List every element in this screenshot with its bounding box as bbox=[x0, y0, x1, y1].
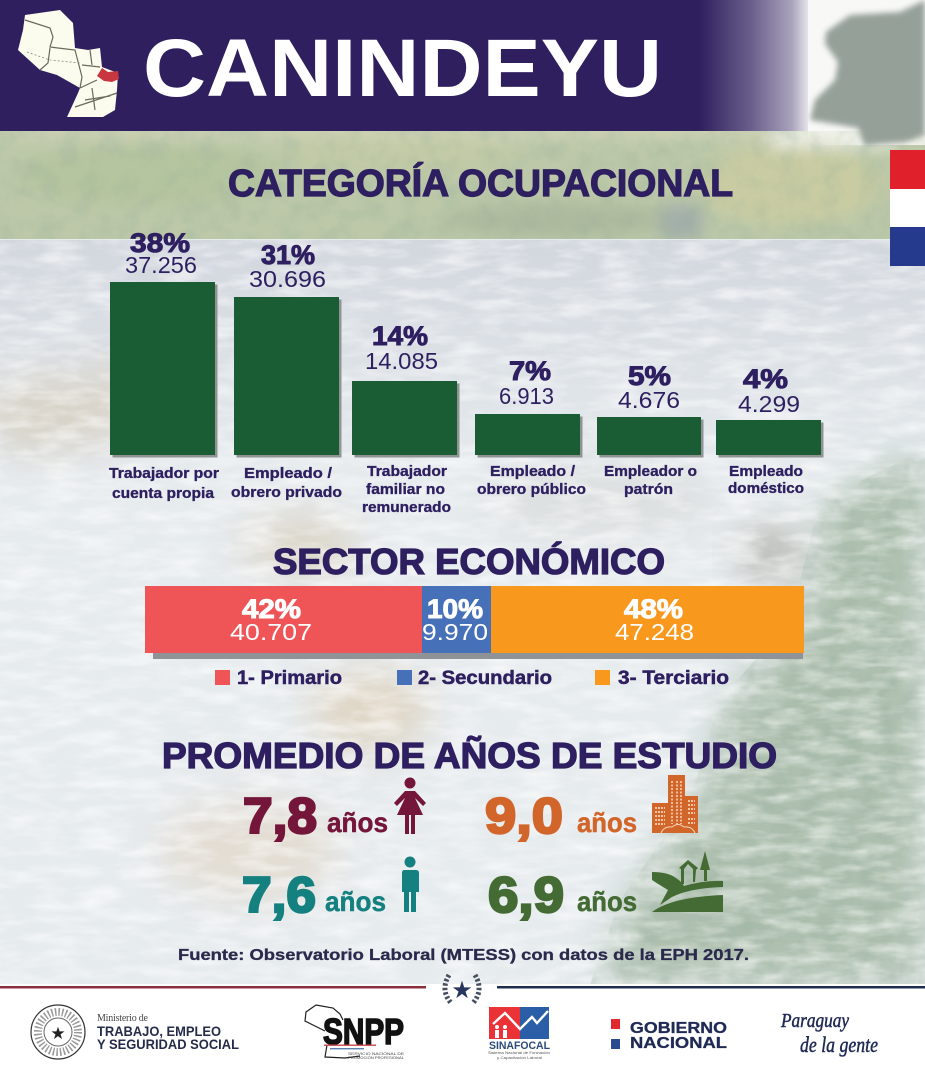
stat: hombres bbox=[242, 856, 419, 923]
bar: empleado / obrero privado bbox=[231, 240, 342, 501]
segment: terciario: 48% bbox=[624, 594, 683, 624]
bar: empleado / obrero privado: obrero privado bbox=[231, 485, 342, 501]
stat: mujeres: 7,8 bbox=[243, 788, 317, 844]
bar: empleado doméstico: 4.299 bbox=[738, 391, 800, 417]
icon: woman bbox=[394, 778, 426, 834]
bar: empleado doméstico: doméstico bbox=[728, 481, 804, 497]
bar: empleado doméstico: 4% bbox=[743, 364, 788, 394]
logo: SNPP: PROMOCIÓN PROFESIONAL bbox=[348, 1055, 405, 1060]
logo: SINAFOCAL: SINAFOCAL bbox=[489, 1040, 550, 1052]
stat: rural bbox=[488, 851, 723, 923]
logo: gobierno nacional: GOBIERNO bbox=[630, 1020, 727, 1037]
stat: rural: años bbox=[577, 886, 637, 917]
bar: empleador o patrón: Empleador o bbox=[604, 464, 697, 480]
bar chart: categoría ocupacional bbox=[109, 228, 824, 516]
bar: trabajador por cuenta propia: 37.256 bbox=[125, 252, 197, 278]
bar: empleador o patrón: patrón bbox=[624, 482, 673, 498]
bar: trabajador familiar no remunerado: 14% bbox=[372, 321, 428, 351]
logo: ministerio de trabajo: Ministerio de bbox=[97, 1013, 149, 1024]
source note: Fuente: Observatorio Laboral (MTESS) con datos de la EPH 2017. bbox=[178, 947, 749, 964]
segment: terciario: 47.248 bbox=[615, 619, 694, 645]
bar: empleado doméstico bbox=[716, 364, 824, 497]
icon: man bbox=[402, 856, 419, 912]
logo: SINAFOCAL: Sistema Nacional de Formación bbox=[488, 1050, 550, 1055]
bar: trabajador por cuenta propia: 38% bbox=[130, 228, 190, 258]
icon: city buildings bbox=[652, 775, 698, 833]
logo: ministerio de trabajo bbox=[31, 1005, 239, 1059]
heading: promedio de años de estudio: PROMEDIO DE AÑOS DE ESTUDIO bbox=[162, 734, 777, 776]
logo: paraguay de la gente bbox=[780, 1010, 878, 1057]
logo: ministerio de trabajo: Y SEGURIDAD SOCIAL bbox=[97, 1036, 239, 1052]
bar: empleado doméstico: Empleado bbox=[729, 464, 803, 480]
emblem: wreath and star: ★ bbox=[451, 977, 473, 1004]
stat: urbano bbox=[485, 775, 698, 844]
segment: terciario bbox=[491, 586, 804, 653]
bar: trabajador familiar no remunerado bbox=[352, 321, 460, 516]
stat: rural: 6,9 bbox=[488, 867, 564, 923]
icon: Paraguay map bbox=[18, 10, 119, 117]
bar: trabajador familiar no remunerado: 14.085 bbox=[365, 348, 438, 374]
heading: sector económico: SECTOR ECONÓMICO bbox=[273, 540, 665, 582]
logo: gobierno nacional bbox=[611, 1019, 727, 1052]
bar: empleado / obrero público: 6.913 bbox=[499, 383, 554, 409]
segment: secundario: 10% bbox=[427, 594, 483, 624]
footer panel bbox=[0, 975, 925, 1080]
legend bbox=[215, 668, 729, 689]
logo: SNPP bbox=[305, 1005, 405, 1060]
logo: ministerio de trabajo: TRABAJO, EMPLEO bbox=[97, 1023, 221, 1039]
logo: SNPP: SERVICIO NACIONAL DE bbox=[348, 1051, 404, 1056]
logo: ministerio de trabajo: ★ bbox=[50, 1024, 66, 1043]
logo: paraguay de la gente: Paraguay bbox=[780, 1010, 849, 1032]
flag bbox=[890, 150, 925, 266]
title: CANINDEYU bbox=[143, 23, 662, 114]
bar: empleador o patrón: 5% bbox=[628, 361, 671, 391]
bar: trabajador por cuenta propia bbox=[109, 228, 219, 502]
bar: trabajador familiar no remunerado: Trabajador bbox=[367, 464, 447, 480]
heading: categoría ocupacional: CATEGORÍA OCUPACIONAL bbox=[228, 161, 733, 205]
segment: secundario bbox=[422, 586, 491, 653]
bar: empleador o patrón: 4.676 bbox=[618, 387, 680, 413]
bar: empleado / obrero público: 7% bbox=[509, 356, 551, 386]
icon: rural house and hills bbox=[652, 851, 723, 912]
logo: SINAFOCAL bbox=[488, 1007, 550, 1060]
bar: trabajador por cuenta propia: Trabajador por bbox=[109, 466, 219, 482]
bar: empleado / obrero privado: Empleado / bbox=[244, 466, 332, 482]
legend: 2- Secundario bbox=[418, 668, 552, 689]
segment: secundario: 9.970 bbox=[422, 619, 488, 645]
segment: primario: 42% bbox=[242, 594, 301, 624]
stat: mujeres bbox=[243, 778, 426, 844]
logo: gobierno nacional: NACIONAL bbox=[630, 1035, 727, 1052]
legend: 3- Terciario bbox=[618, 668, 729, 689]
bar: empleado / obrero público bbox=[475, 356, 586, 498]
stat: urbano: años bbox=[577, 807, 637, 838]
stat: mujeres: años bbox=[327, 807, 388, 838]
stacked bar: sector económico bbox=[145, 586, 804, 659]
bar: empleador o patrón bbox=[597, 361, 704, 498]
legend: 1- Primario bbox=[237, 668, 342, 689]
emblem: wreath and star bbox=[445, 975, 479, 1004]
logo: SNPP: SNPP bbox=[323, 1011, 404, 1052]
bar: empleado / obrero público: obrero público bbox=[477, 482, 586, 498]
bar: empleado / obrero público: Empleado / bbox=[490, 464, 575, 480]
stat: hombres: 7,6 bbox=[242, 867, 316, 923]
bar: trabajador por cuenta propia: cuenta propia bbox=[112, 486, 215, 502]
bar: empleado / obrero privado: 31% bbox=[261, 240, 315, 270]
logo: SINAFOCAL: y Capacitación Laboral bbox=[497, 1055, 542, 1060]
segment: primario: 40.707 bbox=[230, 619, 312, 645]
stat: urbano: 9,0 bbox=[485, 788, 563, 844]
segment: primario bbox=[145, 586, 422, 653]
bar: empleado / obrero privado: 30.696 bbox=[249, 266, 326, 292]
stat: hombres: años bbox=[325, 886, 386, 917]
header band bbox=[0, 0, 808, 131]
bar: trabajador familiar no remunerado: familiar no bbox=[366, 482, 445, 498]
logo: paraguay de la gente: de la gente bbox=[800, 1032, 878, 1057]
bar: trabajador familiar no remunerado: remunerado bbox=[362, 500, 451, 516]
